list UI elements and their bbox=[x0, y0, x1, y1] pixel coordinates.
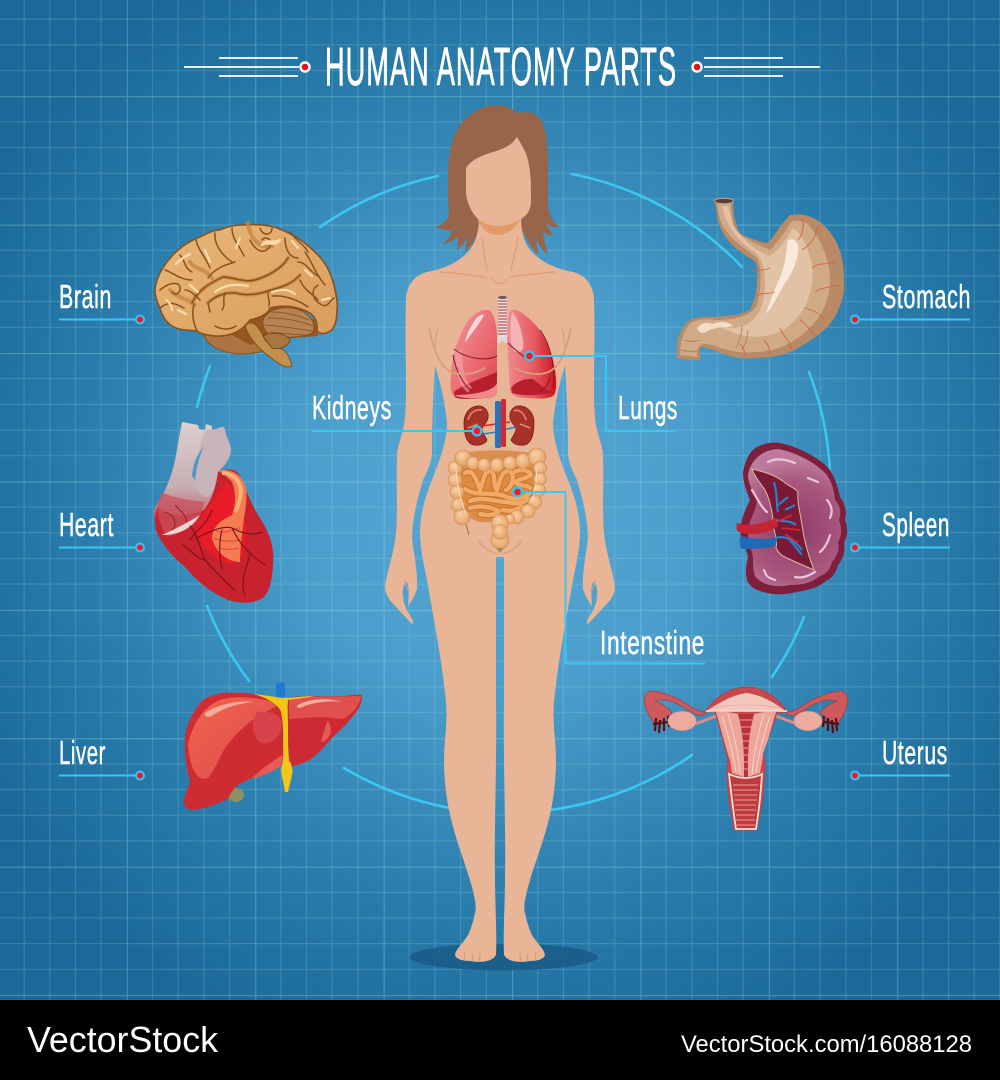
callout: intestine bbox=[513, 488, 705, 664]
label: Kidneys: Kidneys bbox=[312, 389, 392, 426]
sulci bbox=[160, 228, 334, 331]
blue vessel bbox=[276, 682, 285, 697]
label: Intenstine: Intenstine bbox=[600, 624, 705, 661]
mesentery base bbox=[456, 450, 540, 522]
brain stem bbox=[245, 323, 292, 367]
left lobe bbox=[288, 695, 362, 766]
inner light tone bbox=[715, 206, 813, 337]
organ on figure: kidneys bbox=[464, 399, 534, 448]
dark under-fold bbox=[232, 300, 318, 345]
left auricle bbox=[157, 492, 204, 537]
body contour lines bbox=[404, 237, 596, 590]
label group: Heart: Heart bbox=[59, 506, 114, 543]
yellow ligament bbox=[253, 694, 315, 792]
temporal base bbox=[203, 325, 278, 354]
organ: brain bbox=[155, 223, 337, 367]
gap between vessels bbox=[192, 447, 204, 480]
toes bbox=[464, 952, 536, 961]
muscle walls bbox=[716, 712, 744, 777]
title ornament: right bbox=[692, 58, 820, 76]
organ: uterus bbox=[644, 687, 848, 830]
cerebellum bbox=[263, 308, 314, 337]
label group: Uterus: Uterus bbox=[882, 734, 948, 771]
trachea bbox=[495, 296, 510, 343]
label group: Liver: Liver bbox=[59, 734, 106, 771]
hair bbox=[435, 105, 560, 255]
uterine body bbox=[705, 687, 787, 830]
title ornament: left bbox=[184, 58, 310, 76]
stomach base bbox=[677, 200, 844, 360]
cerebrum bbox=[155, 225, 337, 336]
floor shadow bbox=[410, 944, 598, 970]
middle tone bbox=[680, 204, 830, 357]
label group: Uterus bbox=[851, 734, 950, 780]
organ: spleen bbox=[736, 443, 847, 594]
vessels bbox=[736, 518, 778, 534]
figure: woman silhouette bbox=[385, 105, 615, 970]
body: left half bbox=[385, 215, 501, 962]
fallopian tube: left bbox=[644, 691, 706, 725]
fundus highlight bbox=[705, 693, 787, 712]
fallopian tube: right bbox=[786, 691, 848, 725]
ovarian ligaments bbox=[695, 716, 797, 724]
left lung bbox=[450, 310, 497, 399]
fimbriae bbox=[653, 716, 669, 733]
right lobe main light area bbox=[188, 697, 281, 779]
organ: liver bbox=[184, 682, 362, 810]
label: Lungs: Lungs bbox=[618, 389, 678, 426]
sulci soft shade bbox=[170, 223, 300, 305]
highlight bbox=[766, 239, 799, 314]
label group: Spleen: Spleen bbox=[882, 506, 950, 543]
veins bbox=[740, 218, 838, 356]
breast contour lines bbox=[429, 328, 571, 374]
cervix stripes bbox=[738, 714, 754, 777]
vagina canal bbox=[729, 774, 762, 829]
label group: Spleen bbox=[851, 506, 950, 552]
esophagus opening bbox=[714, 198, 734, 204]
face bbox=[466, 137, 531, 226]
highlights bbox=[752, 459, 832, 580]
chin shadow bbox=[478, 217, 521, 235]
outer capsule bbox=[740, 443, 847, 594]
ring arcs around the figure bbox=[197, 174, 830, 810]
label group: Stomach bbox=[851, 278, 971, 324]
right lung bbox=[507, 310, 556, 399]
label group: Brain: Brain bbox=[59, 278, 112, 315]
bright muscle bbox=[196, 482, 246, 565]
organ on figure: lungs bbox=[450, 296, 556, 399]
right lung shading bbox=[510, 312, 523, 352]
callout: lungs bbox=[525, 352, 678, 431]
footer wordmark: VectorStock bbox=[27, 1019, 219, 1060]
ovaries bbox=[668, 712, 696, 730]
body: right half bbox=[499, 215, 615, 962]
organ on figure: intestine bbox=[448, 448, 546, 553]
footer band bbox=[0, 1000, 1000, 1080]
footer image id: VectorStock.com/16088128 bbox=[681, 1031, 972, 1058]
orange highlight bbox=[212, 470, 247, 562]
callout: kidneys bbox=[312, 389, 481, 435]
highlights bbox=[166, 238, 330, 314]
hilum bbox=[752, 469, 814, 570]
liver body bbox=[184, 693, 283, 810]
gallbladder bbox=[228, 788, 244, 802]
vessels bbox=[154, 422, 231, 535]
inner tissue bbox=[748, 449, 841, 586]
coronary vessels bbox=[182, 510, 265, 595]
left lung shading bbox=[454, 372, 497, 399]
large intestine beads bbox=[448, 448, 546, 549]
small intestine bbox=[465, 470, 531, 515]
second vessel shade bbox=[193, 428, 231, 497]
organ: stomach bbox=[677, 198, 844, 360]
heart main body bbox=[155, 469, 273, 603]
organ: heart bbox=[154, 422, 273, 603]
